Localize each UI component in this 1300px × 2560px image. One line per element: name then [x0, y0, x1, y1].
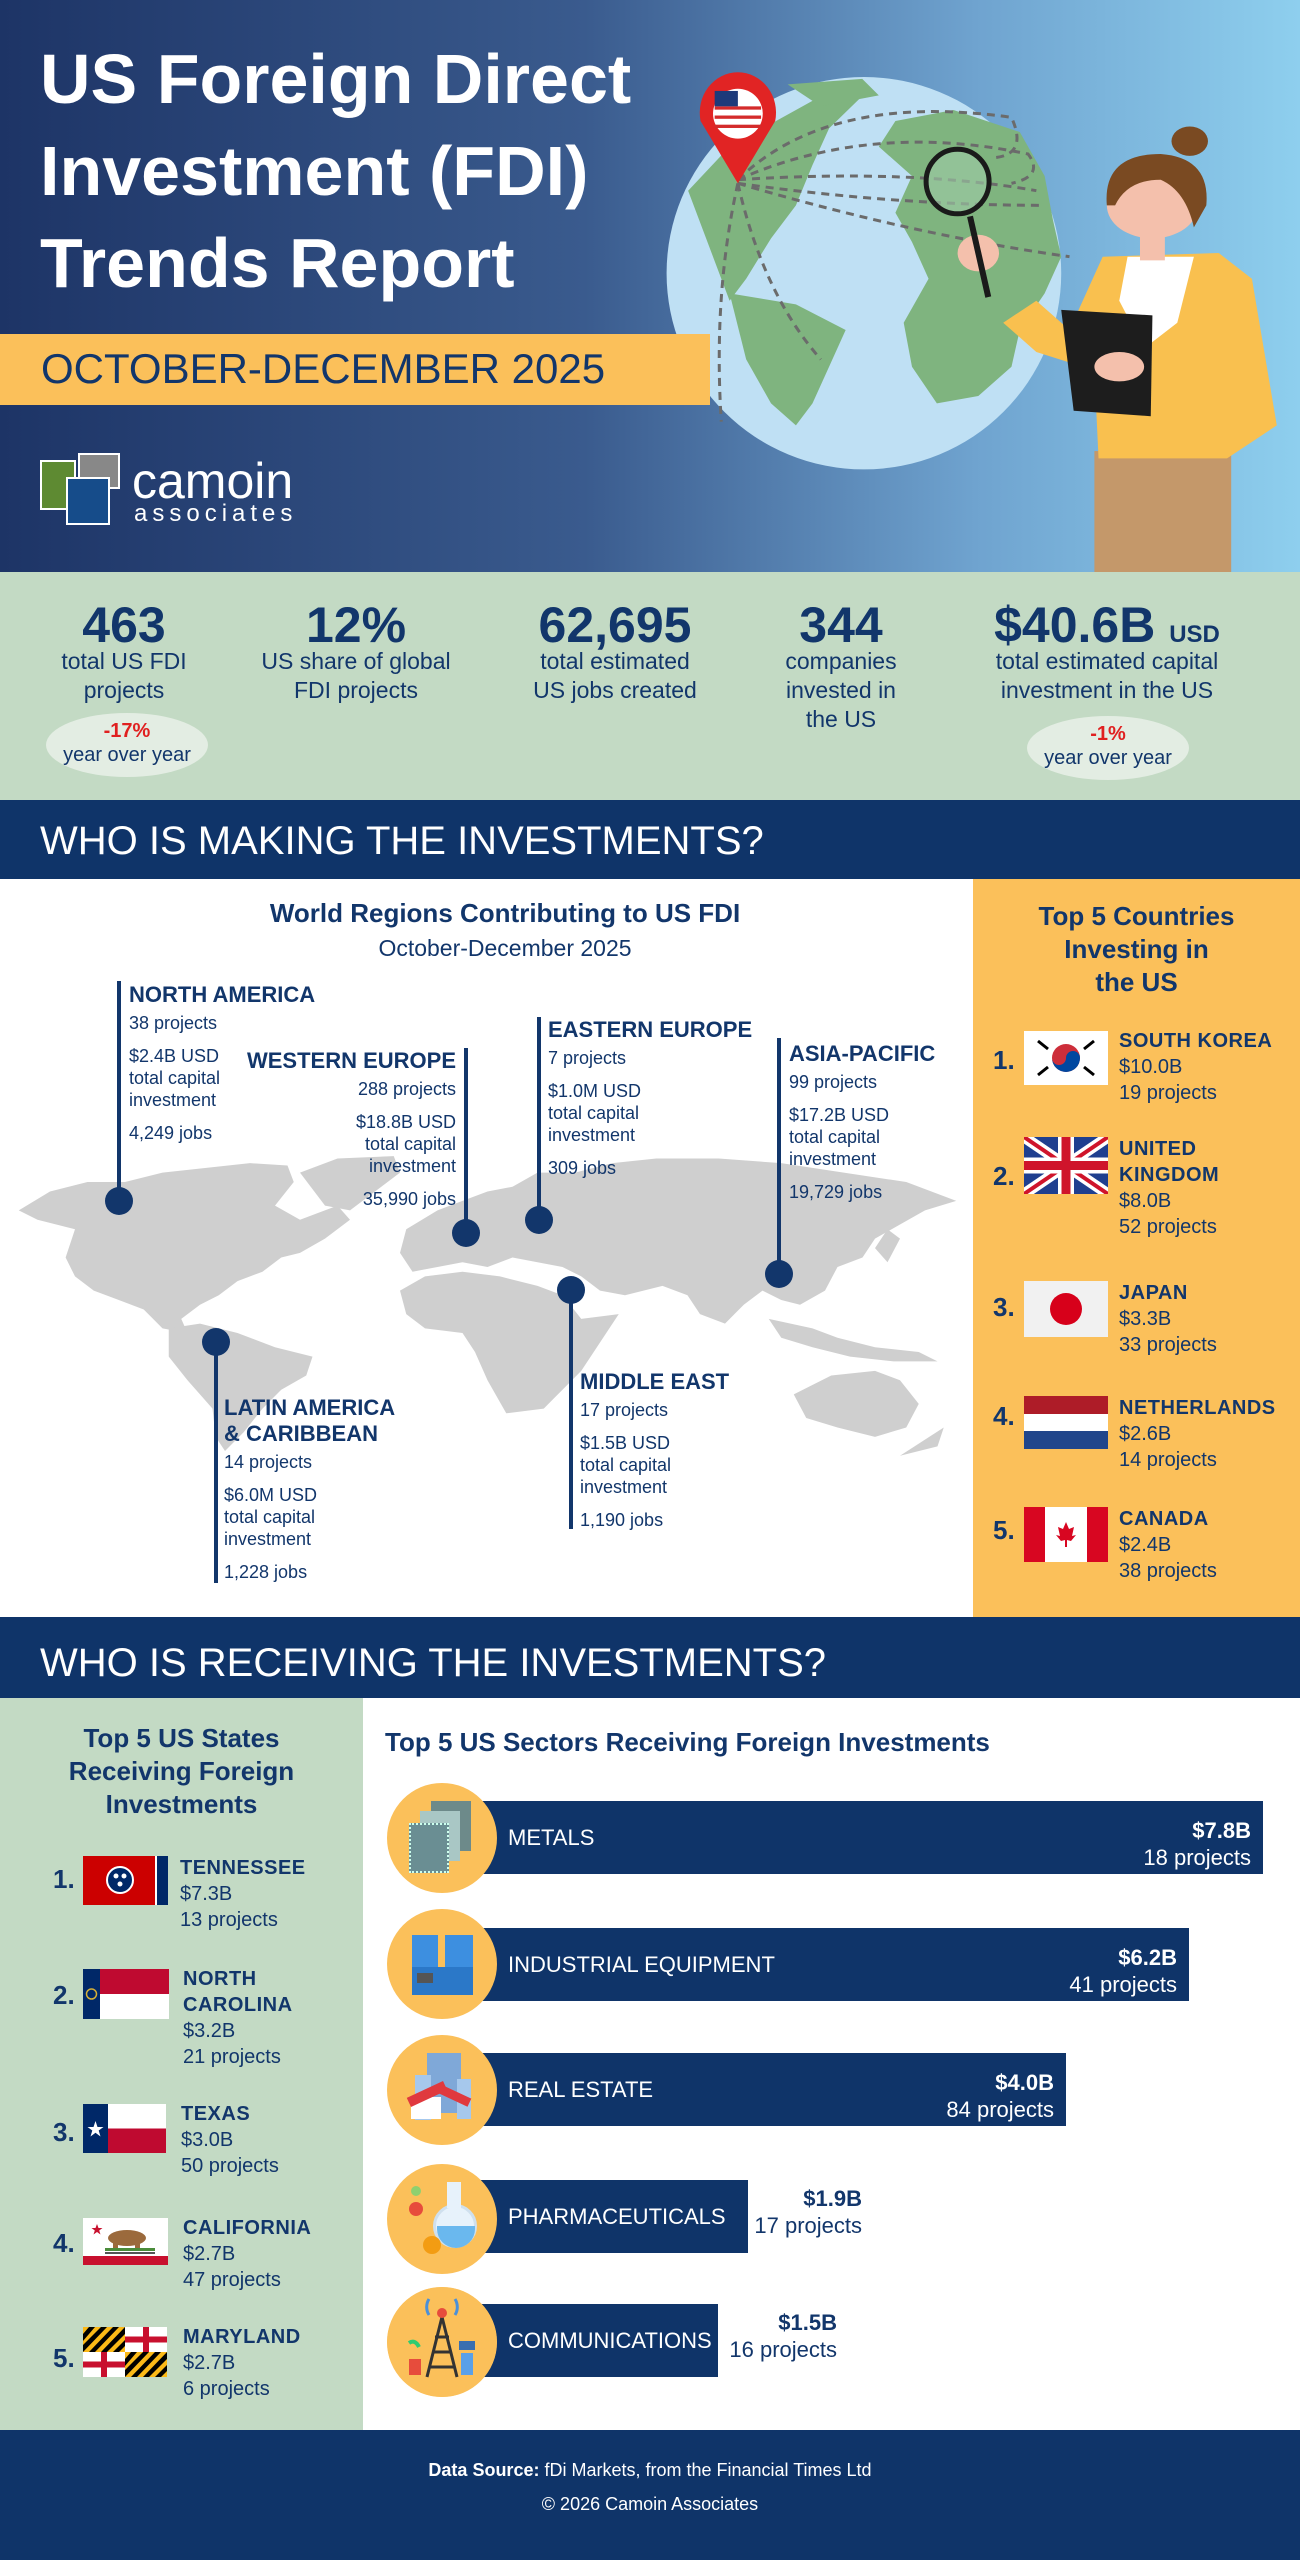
icon: communications [387, 2287, 497, 2397]
region: asia-pacific: $17.2B USD [789, 1105, 889, 1125]
bar: real estate [470, 2053, 1066, 2126]
region: eastern europe [525, 1017, 752, 1234]
callout: -1% yoy: year over year [1044, 747, 1172, 769]
region: middle east: MIDDLE EAST [580, 1369, 729, 1394]
region: north america [105, 981, 315, 1215]
region: north america: 38 projects [129, 1013, 217, 1033]
country 4: netherlands: 14 projects [1119, 1449, 1217, 1471]
value: communications: $1.5B [778, 2310, 837, 2335]
callout: -1% yoy: -1% [1090, 723, 1126, 745]
bar: real estate: REAL ESTATE [508, 2077, 653, 2102]
bar: industrial equipment: 41 projects [1069, 1972, 1177, 1997]
bar: industrial equipment: $6.2B [1118, 1945, 1177, 1970]
state 4: california [53, 2217, 311, 2291]
country 3: japan: JAPAN [1119, 1282, 1188, 1304]
icon: industrial equipment [387, 1909, 497, 2019]
icon: metals [387, 1783, 497, 1893]
region: eastern europe: 7 projects [548, 1048, 626, 1068]
region: western europe: WESTERN EUROPE [247, 1048, 456, 1073]
title: US Foreign Direct [40, 40, 631, 118]
region: asia-pacific: investment [789, 1149, 876, 1169]
region: latin america [202, 1328, 395, 1583]
panel: top 5 countries [973, 879, 1300, 1617]
country 3: japan: 3. [993, 1292, 1015, 1322]
region: north america: 4,249 jobs [129, 1123, 212, 1143]
state 3: texas: TEXAS [181, 2103, 250, 2125]
country 5: canada: $2.4B [1119, 1534, 1171, 1556]
map title: October-December 2025 [378, 935, 632, 961]
region: western europe: 35,990 jobs [363, 1189, 456, 1209]
state 5: maryland: 6 projects [183, 2378, 270, 2400]
region: western europe: total capital [365, 1134, 456, 1154]
stat: $40.6B [994, 597, 1220, 703]
state 4: california: CALIFORNIA [183, 2217, 311, 2239]
footer: © 2026 Camoin Associates [542, 2494, 758, 2514]
state 4: california: 4. [53, 2228, 75, 2258]
bar: communications [470, 2304, 718, 2377]
bar: metals: $7.8B [1192, 1818, 1251, 1843]
heading: top 5 countries: the US [1095, 967, 1178, 997]
stat: $40.6B: investment in the US [1001, 677, 1213, 703]
stat: 463 projects: total US FDI [61, 648, 187, 674]
illustration: globe with pin and woman [666, 72, 1277, 572]
region: north america: NORTH AMERICA [129, 982, 315, 1007]
country 1: south korea [993, 1030, 1272, 1104]
region: middle east [557, 1276, 729, 1530]
region: western europe [247, 1048, 480, 1247]
date band: OCTOBER-DECEMBER 2025 [41, 345, 605, 392]
logo: camoin associates [40, 453, 297, 527]
stat: 344 companies: the US [806, 706, 876, 732]
heading: top 5 countries [1038, 901, 1234, 997]
world map [19, 1156, 956, 1456]
region: eastern europe: EASTERN EUROPE [548, 1017, 752, 1042]
state 3: texas [53, 2103, 279, 2177]
stat: 463 projects [61, 597, 187, 703]
state 2: north carolina: $3.2B [183, 2020, 235, 2042]
country 5: canada: 38 projects [1119, 1560, 1217, 1582]
header banner [0, 0, 1300, 572]
state 1: tennessee: 1. [53, 1864, 75, 1894]
stat: 62,695 jobs: total estimated [540, 648, 690, 674]
country 2: united kingdom [993, 1137, 1219, 1238]
heading: top 5 sectors: Top 5 US Sectors Receiving Foreign Investments [385, 1727, 990, 1757]
value: pharmaceuticals: $1.9B [803, 2186, 862, 2211]
state 2: north carolina: 21 projects [183, 2046, 281, 2068]
region: asia-pacific: 19,729 jobs [789, 1182, 882, 1202]
region: latin america: total capital [224, 1507, 315, 1527]
bar: metals [470, 1801, 1263, 1874]
icon: real estate [387, 2035, 497, 2145]
state 1: tennessee [53, 1856, 306, 1931]
state 2: north carolina: 2. [53, 1980, 75, 2010]
country 3: japan [993, 1281, 1217, 1356]
region: eastern europe: 309 jobs [548, 1158, 616, 1178]
section heading: who is receiving: WHO IS RECEIVING THE INVESTMENTS? [40, 1641, 826, 1685]
region: north america: total capital [129, 1068, 220, 1088]
state 3: texas: 3. [53, 2117, 75, 2147]
callout: -1% yoy [1027, 716, 1189, 780]
stat: 344 companies: 344 [799, 597, 883, 653]
region: latin america: 14 projects [224, 1452, 312, 1472]
region: asia-pacific: 99 projects [789, 1072, 877, 1092]
state 3: texas: $3.0B [181, 2129, 233, 2151]
region: latin america: 1,228 jobs [224, 1562, 307, 1582]
region: middle east: total capital [580, 1455, 671, 1475]
footer [0, 2430, 1300, 2560]
title: Trends Report [40, 224, 515, 302]
title: Investment (FDI) [40, 132, 588, 210]
stat: $40.6B: total estimated capital [996, 648, 1218, 674]
country 3: japan: 33 projects [1119, 1334, 1217, 1356]
bar: metals: 18 projects [1143, 1845, 1251, 1870]
stat: 463 projects: 463 [82, 597, 166, 653]
stat: 62,695 jobs: 62,695 [539, 597, 691, 653]
state 4: california: $2.7B [183, 2243, 235, 2265]
heading: top 5 states [69, 1723, 294, 1819]
callout: -17% yoy: -17% [104, 720, 150, 742]
footer: Data Source: fDi Markets, from the Financial Times Ltd [428, 2460, 872, 2480]
country 5: canada: CANADA [1119, 1508, 1209, 1530]
stat: 12% [261, 597, 451, 703]
stat: 463 projects: projects [84, 677, 164, 703]
icon: pharmaceuticals [387, 2164, 497, 2274]
stat: 62,695 jobs: US jobs created [533, 677, 697, 703]
country 2: united kingdom: KINGDOM [1119, 1164, 1219, 1186]
state 1: tennessee: 13 projects [180, 1909, 278, 1931]
value: pharmaceuticals: 17 projects [754, 2213, 862, 2238]
state 4: california: 47 projects [183, 2269, 281, 2291]
heading: top 5 states: Receiving Foreign [69, 1756, 294, 1786]
heading: top 5 countries: Investing in [1064, 934, 1209, 964]
country 3: japan: $3.3B [1119, 1308, 1171, 1330]
stat: $40.6B: $40.6B USD [994, 597, 1220, 653]
region: western europe: $18.8B USD [356, 1112, 456, 1132]
state 2: north carolina [53, 1968, 293, 2068]
country 1: south korea: $10.0B [1119, 1056, 1182, 1078]
region: middle east: 17 projects [580, 1400, 668, 1420]
panel: top 5 states [0, 1698, 363, 2430]
bar: metals: METALS [508, 1825, 594, 1850]
value: communications: 16 projects [729, 2337, 837, 2362]
region: western europe: investment [369, 1156, 456, 1176]
bar: industrial equipment [470, 1928, 1189, 2001]
state 1: tennessee: $7.3B [180, 1883, 232, 1905]
region: latin america: $6.0M USD [224, 1485, 317, 1505]
country 4: netherlands: NETHERLANDS [1119, 1397, 1276, 1419]
callout: -17% yoy: year over year [63, 744, 191, 766]
state 2: north carolina: CAROLINA [183, 1994, 293, 2016]
state 5: maryland: MARYLAND [183, 2326, 301, 2348]
value: pharmaceuticals [754, 2186, 862, 2238]
stat: 344 companies: companies [785, 648, 897, 674]
region: western europe: 288 projects [358, 1079, 456, 1099]
region: asia-pacific [765, 1038, 935, 1288]
region: middle east: investment [580, 1477, 667, 1497]
bar: pharmaceuticals: PHARMACEUTICALS [508, 2204, 726, 2229]
country 4: netherlands: 4. [993, 1401, 1015, 1431]
stat: 12%: FDI projects [294, 677, 418, 703]
country 2: united kingdom: $8.0B [1119, 1190, 1171, 1212]
bar: real estate: $4.0B [995, 2070, 1054, 2095]
country 1: south korea: 1. [993, 1045, 1015, 1075]
stat: 62,695 jobs [533, 597, 697, 703]
region: north america: investment [129, 1090, 216, 1110]
region: eastern europe: total capital [548, 1103, 639, 1123]
bar: industrial equipment: INDUSTRIAL EQUIPMENT [508, 1952, 775, 1977]
region: eastern europe: $1.0M USD [548, 1081, 641, 1101]
state 5: maryland [53, 2326, 301, 2400]
region: middle east: 1,190 jobs [580, 1510, 663, 1530]
section heading: who is receiving [0, 1617, 1300, 1698]
bar: pharmaceuticals [470, 2180, 748, 2253]
stat: 344 companies [785, 597, 897, 732]
region: latin america: LATIN AMERICA [224, 1395, 395, 1420]
region: north america: $2.4B USD [129, 1046, 219, 1066]
value: communications [729, 2310, 837, 2362]
country 2: united kingdom: UNITED [1119, 1138, 1196, 1160]
country 1: south korea: 19 projects [1119, 1082, 1217, 1104]
state 1: tennessee: TENNESSEE [180, 1857, 306, 1879]
callout: -17% yoy [46, 713, 208, 777]
logo: camoin associates: associates [134, 500, 297, 527]
country 2: united kingdom: 52 projects [1119, 1216, 1217, 1238]
section heading: who is making [0, 800, 1300, 879]
state 5: maryland: 5. [53, 2343, 75, 2373]
country 4: netherlands: $2.6B [1119, 1423, 1171, 1445]
heading: top 5 states: Investments [106, 1789, 257, 1819]
country 1: south korea: SOUTH KOREA [1119, 1030, 1272, 1052]
logo: camoin associates: camoin [132, 453, 293, 509]
heading: top 5 countries: Top 5 Countries [1039, 901, 1234, 931]
state 2: north carolina: NORTH [183, 1968, 257, 1990]
region: asia-pacific: ASIA-PACIFIC [789, 1041, 935, 1066]
heading: top 5 states: Top 5 US States [83, 1723, 280, 1753]
state 5: maryland: $2.7B [183, 2352, 235, 2374]
region: asia-pacific: total capital [789, 1127, 880, 1147]
region: middle east: $1.5B USD [580, 1433, 670, 1453]
country 5: canada [993, 1507, 1217, 1582]
country 2: united kingdom: 2. [993, 1161, 1015, 1191]
region: eastern europe: investment [548, 1125, 635, 1145]
date band [0, 334, 710, 405]
state 3: texas: 50 projects [181, 2155, 279, 2177]
bar: communications: COMMUNICATIONS [508, 2328, 712, 2353]
stat: 12%: 12% [306, 597, 406, 653]
country 5: canada: 5. [993, 1515, 1015, 1545]
map title [270, 898, 740, 961]
region: latin america: investment [224, 1529, 311, 1549]
section heading: who is making: WHO IS MAKING THE INVESTMENTS? [40, 819, 764, 863]
title [40, 40, 631, 302]
country 4: netherlands [993, 1396, 1276, 1471]
bar: real estate: 84 projects [946, 2097, 1054, 2122]
map title: World Regions Contributing to US FDI [270, 898, 740, 928]
region: latin america: & CARIBBEAN [224, 1421, 378, 1446]
stats band [0, 572, 1300, 800]
stat: 344 companies: invested in [786, 677, 896, 703]
stat: 12%: US share of global [261, 648, 451, 674]
